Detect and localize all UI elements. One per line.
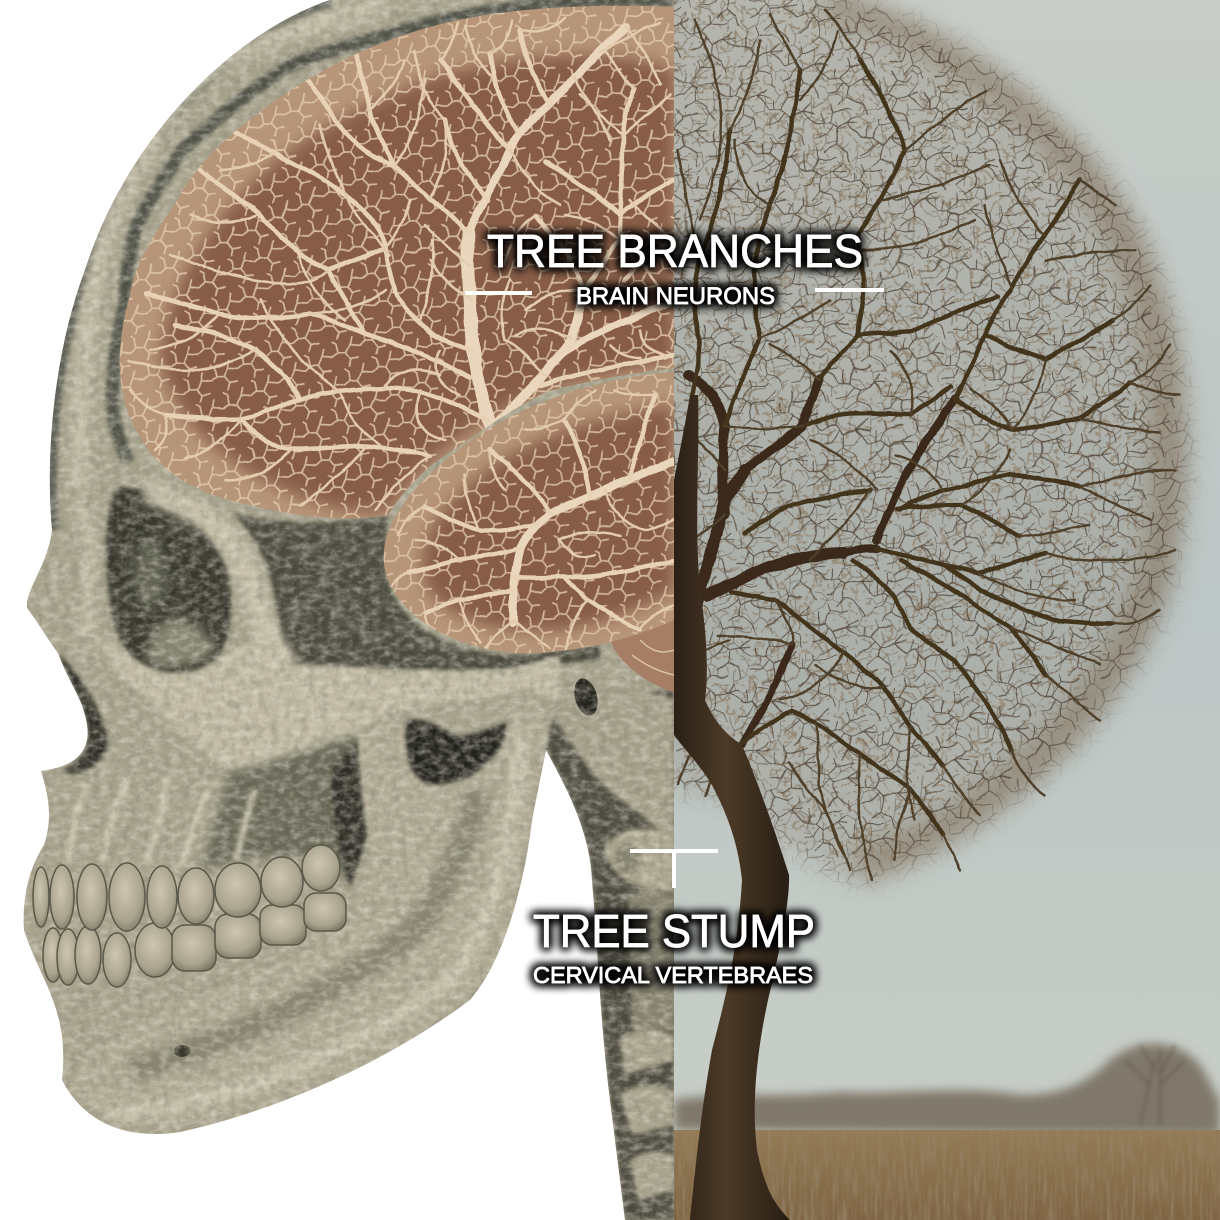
subheading: brain neurons: BRAIN NEURONS (576, 283, 775, 310)
secondary limbs (692, 60, 1130, 834)
vein network (128, 18, 674, 510)
upper vertebra (604, 829, 674, 891)
brain: cerebrum (100, 0, 690, 540)
main limbs (688, 375, 955, 745)
panel: tree photograph (650, 0, 1220, 1220)
maxilla ridges (68, 775, 255, 866)
left tick (465, 291, 532, 295)
thick veins (467, 27, 674, 432)
mastoid hole (574, 678, 598, 716)
right tick (815, 288, 884, 292)
upper teeth (33, 845, 340, 931)
tree branches (678, 10, 1180, 880)
cranium light band (80, 7, 386, 490)
eye socket (106, 487, 231, 674)
lower vertebrae (620, 1029, 674, 1200)
skull bone (0, 0, 674, 1220)
label: tree branches / brain neurons (465, 225, 884, 310)
dark folds between veins (160, 55, 674, 512)
wisps inside cavity (290, 530, 470, 650)
label: tree stump / cervical vertebraes (533, 905, 815, 988)
mental foramen (174, 1045, 190, 1057)
lower teeth (43, 893, 346, 987)
field (674, 1130, 1220, 1220)
medium veins (146, 30, 674, 456)
tree trunk (674, 395, 790, 1220)
heading: tree stump: TREE STUMP (533, 905, 815, 957)
mastoid bone (552, 682, 674, 850)
cranium outer edge (50, 0, 330, 530)
subheading: cervical vertebraes: CERVICAL VERTEBRAES (533, 962, 813, 988)
brain: temporal lobe (370, 370, 680, 660)
brow process (145, 490, 290, 668)
dark folds of lobe (422, 405, 674, 631)
maxilla shading (200, 735, 365, 880)
tertiary branches (678, 10, 1180, 880)
upper face highlights (76, 498, 112, 664)
cerebellum (609, 620, 674, 692)
dark cavity behind the eye (233, 513, 600, 670)
fine pale vein texture (100, 0, 690, 540)
zygomatic arch and cheek (110, 640, 560, 770)
teeth (33, 845, 346, 987)
mandible (68, 697, 546, 1128)
cranium inner dark band (112, 0, 674, 462)
tree crown haze (650, 0, 1220, 920)
heading: tree branches: TREE BRANCHES (487, 225, 863, 277)
twig pattern (650, 0, 1220, 920)
eye socket inner light (145, 617, 215, 666)
bone texture (0, 0, 674, 1220)
vertebra hollow (615, 842, 641, 874)
mandible notch (406, 720, 507, 784)
lobe veins (392, 390, 674, 650)
sky (674, 0, 1220, 1220)
fine veins (128, 18, 674, 510)
maxilla deep shadow (332, 740, 370, 888)
web of fine twigs (674, 0, 1220, 900)
mandible shade (130, 790, 480, 1070)
brown fuzzy rim (830, 0, 1178, 880)
mandible light ridge (110, 730, 520, 1115)
pale texture of lobe (370, 370, 680, 660)
bone highlights (0, 0, 674, 1220)
nasal opening (58, 653, 108, 773)
distant tree line (674, 1044, 1220, 1135)
marker: t-shaped pointer to the trunk (630, 849, 718, 888)
spine dark column (546, 690, 674, 1220)
panel: skull and brain illustration (0, 0, 690, 1220)
vertebra column (628, 889, 674, 1030)
